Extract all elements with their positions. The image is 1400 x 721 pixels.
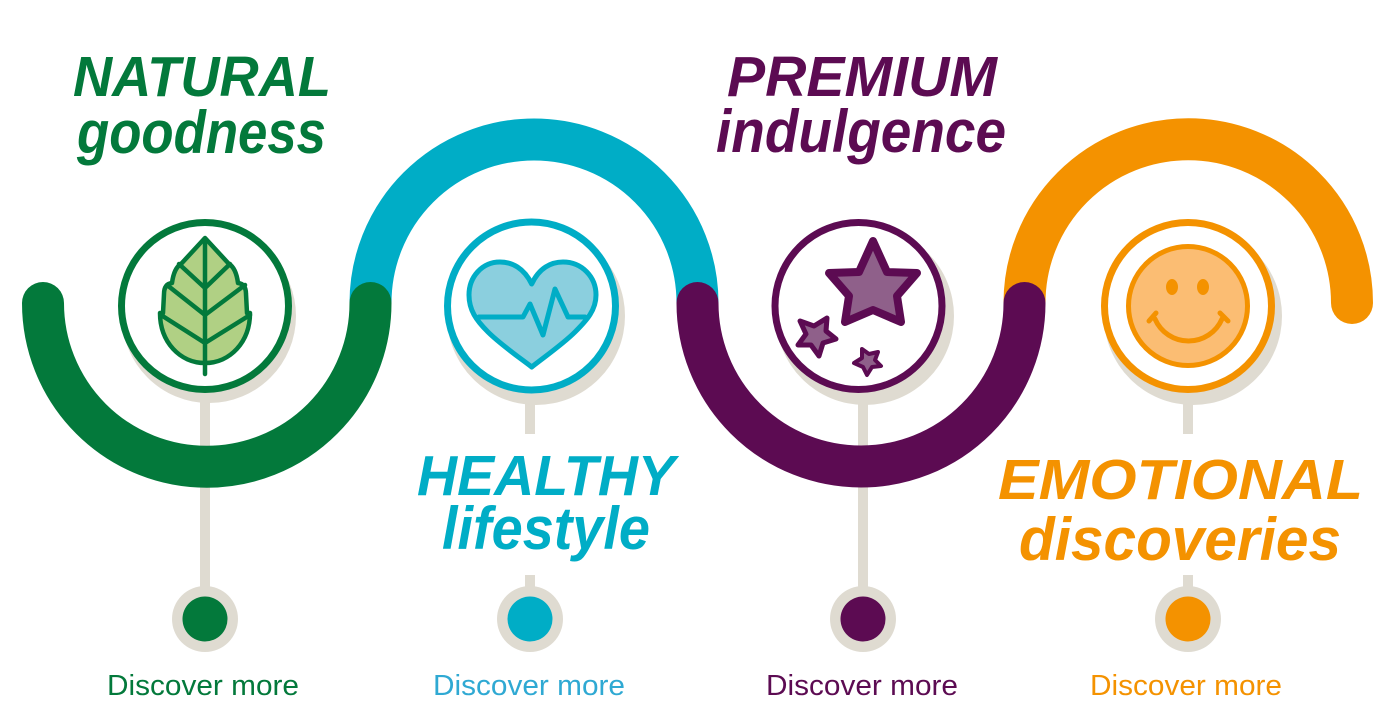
marker: orange [1155, 586, 1221, 652]
heading: healthy lifestyle: lifestyle [442, 495, 650, 562]
link: discover more green: Discover more [107, 670, 299, 702]
heading: premium indulgence: PREMIUM [727, 45, 999, 109]
icon: smiley badge [1104, 222, 1282, 405]
icon: heart badge [447, 222, 625, 405]
wave arc: orange [1024, 139, 1352, 303]
link: discover more purple: Discover more [766, 670, 958, 702]
heading: emotional discoveries [998, 448, 1363, 573]
link: discover more blue: Discover more [433, 670, 625, 702]
connector stems [200, 395, 1193, 600]
wave arc: green [43, 303, 370, 467]
wave arc: purple [698, 303, 1024, 466]
link: discover more orange: Discover more [1090, 670, 1282, 702]
heading: emotional discoveries: discoveries [1019, 506, 1341, 573]
heading: premium indulgence [716, 45, 1006, 165]
marker: blue [497, 586, 563, 652]
heading: healthy lifestyle: HEALTHY [417, 444, 680, 508]
heading: healthy lifestyle [417, 444, 680, 562]
heading: emotional discoveries: EMOTIONAL [998, 448, 1363, 512]
heading: natural goodness: NATURAL [73, 45, 331, 109]
heading: natural goodness: goodness [76, 99, 326, 166]
icon: leaf badge [122, 222, 296, 403]
marker: purple [830, 586, 896, 652]
icon: stars badge [775, 222, 954, 405]
heading: premium indulgence: indulgence [716, 98, 1006, 165]
wave arc: blue [370, 140, 698, 303]
heading: natural goodness [73, 45, 331, 166]
marker: green [172, 586, 238, 652]
